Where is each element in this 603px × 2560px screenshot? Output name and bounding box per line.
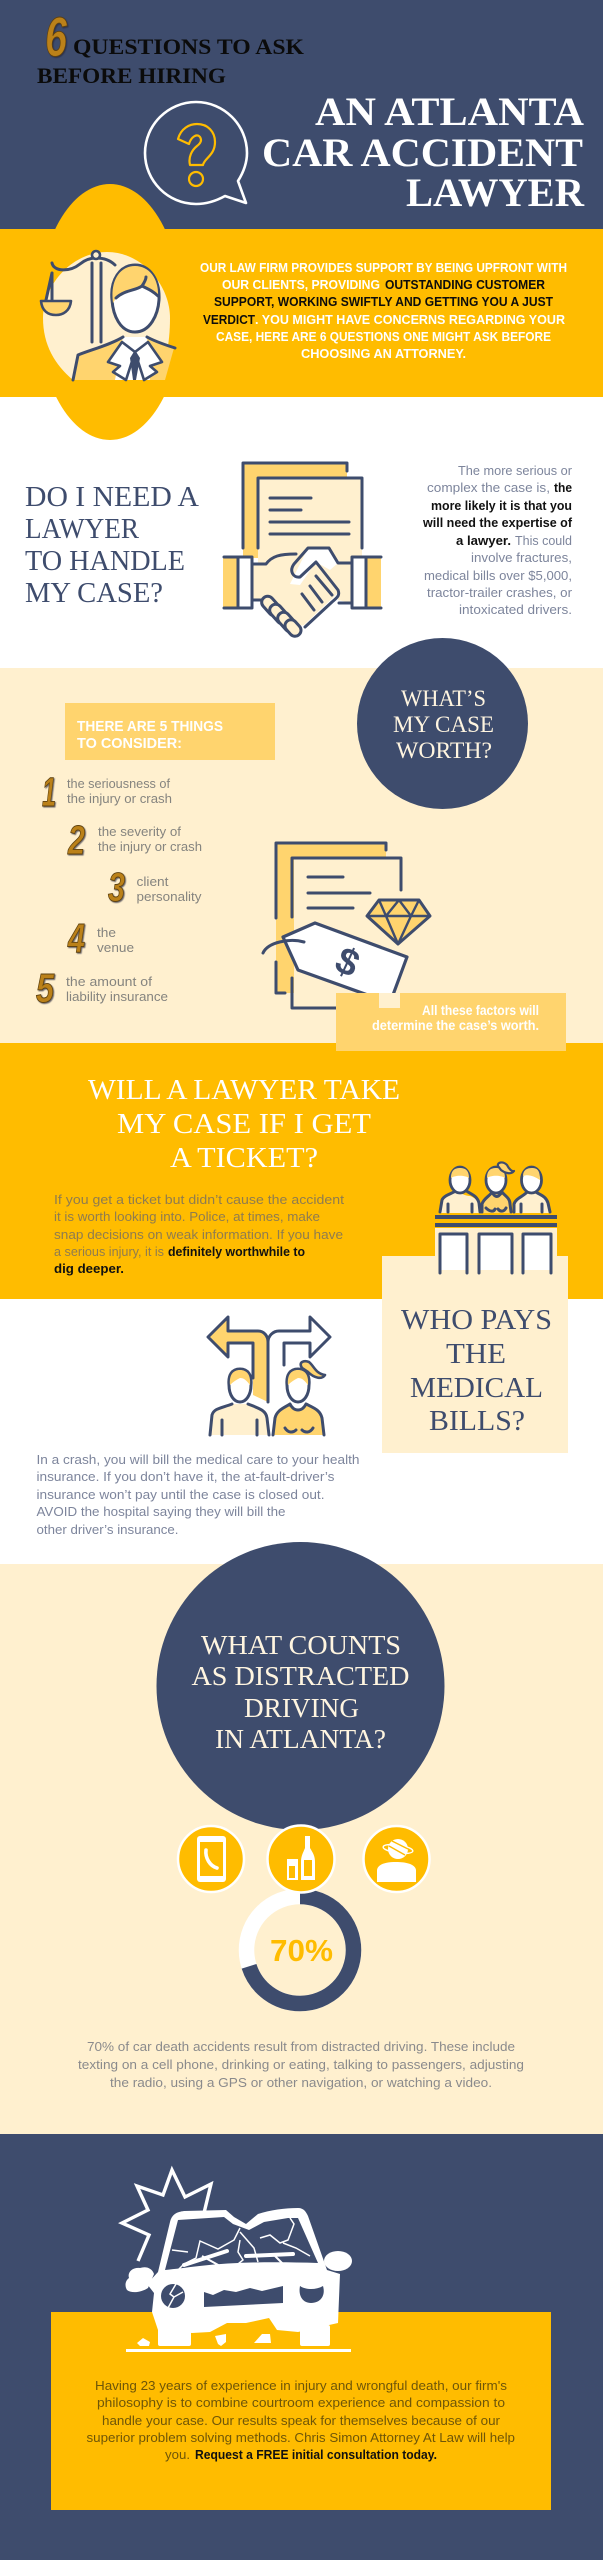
donut chart: 70 percent: 70% [270,1933,333,1968]
text block: firm introduction: SUPPORT, WORKING SWIFTLY AND GETTING YOU A JUST [214,294,553,309]
heading circle: what counts as distracted driving: IN ATLANTA? [215,1724,386,1754]
text block: medical bills explanation: AVOID the hospital saying they will bill the [36,1504,286,1519]
panel: footer call to action [0,2134,603,2560]
text block: firm introduction: OUTSTANDING CUSTOMER [385,277,546,292]
list item 1: the seriousness of [67,776,170,791]
title: an Atlanta car accident lawyer: CAR ACCIDENT [262,130,583,175]
icon: documents and handshake [223,463,381,639]
list item 4: 4 [67,915,85,961]
icon: documents, diamond and price tag: $ [329,939,366,986]
text block: medical bills explanation: insurance. If you don’t have it, the at-fault-driver’s [36,1469,335,1484]
text block: case seriousness [422,463,573,617]
callout: factors determine worth [336,993,566,1051]
callout: five things to consider [65,703,275,760]
text block: ticket explanation: definitely worthwhile to [168,1244,305,1259]
text block: case seriousness: tractor-trailer crashes, or [427,585,573,600]
text block: ticket explanation: a serious injury, it is [54,1244,164,1259]
callout: factors determine worth: determine the case’s worth. [372,1017,539,1033]
text block: ticket explanation: it is worth looking into. Police, at times, make [54,1209,320,1224]
icon: jury box [435,1162,557,1273]
text block: ticket explanation: dig deeper. [54,1261,124,1276]
list item 5: 5 [36,965,55,1011]
heading circle: what's my case worth: MY CASE [393,712,494,737]
heading: do I need a lawyer: DO I NEED A [25,482,200,513]
list item 5: liability insurance [66,989,168,1004]
text block: ticket explanation [54,1192,344,1276]
heading: will a lawyer take my case [88,1075,400,1174]
heading box: who pays the medical bills: BILLS? [429,1405,525,1437]
heading: will a lawyer take my case: A TICKET? [170,1143,318,1174]
icon: speech bubble with question mark [145,102,247,204]
heading circle: what counts as distracted driving [156,1542,444,1830]
list item 3: personality [136,889,202,904]
text block: case seriousness: medical bills over $5,000, [424,568,572,583]
list item 4 [67,915,134,961]
list item 3 [108,864,202,910]
text block: firm introduction: OUR CLIENTS, PROVIDING [222,277,380,292]
donut chart: 70 percent [246,1896,354,2004]
text block: firm philosophy and call to action: philosophy is to combine courtroom experience and compassion to [97,2395,505,2410]
title: an Atlanta car accident lawyer [262,89,585,215]
text block: medical bills explanation [36,1452,360,1537]
text block: firm philosophy and call to action: superior problem solving methods. Chris Simon Attorney At Law will help [86,2430,515,2445]
text block: firm philosophy and call to action: handle your case. Our results speak for themselves because of our [102,2413,501,2428]
icon: documents, diamond and price tag [263,843,430,1008]
icon: distracted person [364,1826,430,1892]
list item 3: client [136,874,169,889]
heading box: who pays the medical bills: THE [446,1338,506,1370]
heading circle: what counts as distracted driving: DRIVING [244,1693,359,1723]
text block: case seriousness: complex the case is, [427,480,550,495]
list item 1: the injury or crash [67,791,172,806]
icon: phone [178,1826,244,1892]
list item 2 [67,817,202,863]
text block: firm introduction: CASE, HERE ARE 6 QUESTIONS ONE MIGHT ASK BEFORE [216,329,551,344]
text block: distracted driving statistic: 70% of car death accidents result from distracted driving. These include [87,2039,515,2054]
text block: firm philosophy and call to action: Request a FREE initial consultation today. [195,2447,437,2462]
heading circle: what counts as distracted driving: AS DISTRACTED [192,1661,410,1691]
text block: firm philosophy and call to action: you. [165,2447,190,2462]
list item 2: the severity of [98,824,181,839]
list item 1 [42,769,172,815]
callout: five things to consider: TO CONSIDER: [77,735,182,752]
text block: case seriousness: the [554,480,572,495]
text block: case seriousness: involve fractures, [471,550,572,565]
heading: will a lawyer take my case: MY CASE IF I GET [117,1109,371,1140]
icon: crashed car [122,2170,352,2352]
text block: case seriousness: more likely it is that you [431,498,572,513]
panel: will a lawyer take my case [0,1043,603,1299]
text block: case seriousness: intoxicated drivers. [459,602,572,617]
heading circle: what's my case worth: WORTH? [396,738,492,763]
text block: firm introduction: OUR LAW FIRM PROVIDES SUPPORT BY BEING UPFRONT WITH [200,260,567,275]
list item 3: 3 [108,864,125,910]
heading: do I need a lawyer [25,482,200,609]
text block: firm introduction: VERDICT [203,312,255,327]
heading: 6 questions to ask before hiring [37,5,304,88]
panel: what's my case worth [0,638,603,1051]
heading box: who pays the medical bills: MEDICAL [410,1372,543,1404]
heading: will a lawyer take my case: WILL A LAWYER TAKE [88,1075,400,1106]
text block: firm philosophy and call to action: Having 23 years of experience in injury and wrongful death, our firm's [95,2378,508,2393]
list item 5: the amount of [66,974,152,989]
heading: do I need a lawyer: LAWYER [25,514,139,545]
list item 5 [36,965,168,1011]
icon: bottle and glass [268,1826,334,1892]
text block: firm philosophy and call to action [86,2378,515,2462]
text block: medical bills explanation: other driver’s insurance. [36,1522,179,1537]
text block: medical bills explanation: In a crash, you will bill the medical care to your health [36,1452,360,1467]
text block: case seriousness: will need the expertise of [422,515,573,530]
icon: lawyer with scales of justice [41,251,175,380]
text block: distracted driving statistic: the radio, using a GPS or other navigation, or watching a video. [110,2075,492,2090]
heading: do I need a lawyer: TO HANDLE [25,546,185,577]
list item 4: venue [97,940,134,955]
title: an Atlanta car accident lawyer: AN ATLANTA [315,89,584,134]
list item 2: the injury or crash [98,839,202,854]
heading circle: what counts as distracted driving: WHAT COUNTS [201,1630,401,1660]
panel: who pays the medical bills [36,1256,568,1537]
heading box: who pays the medical bills [382,1256,568,1453]
heading circle: what's my case worth [357,638,528,809]
title: an Atlanta car accident lawyer: LAWYER [406,170,585,215]
text block: firm introduction [200,260,567,361]
heading circle: what's my case worth: WHAT’S [401,686,486,711]
list item 2: 2 [67,817,85,863]
icon: two people at diverging arrows [208,1317,330,1435]
callout: five things to consider: THERE ARE 5 THINGS [77,718,223,735]
text block: case seriousness: a lawyer. [456,533,511,548]
text block: firm introduction: CHOOSING AN ATTORNEY. [301,346,466,361]
text block: case seriousness: This could [515,533,572,548]
heading: 6 questions to ask before hiring: 6 [45,5,68,68]
panel: hero header [0,0,603,440]
heading: 6 questions to ask before hiring: BEFORE HIRING [37,63,226,88]
list item 1: 1 [42,769,56,815]
callout: factors determine worth: All these factors will [422,1002,539,1018]
panel: distracted driving [0,1542,603,2134]
heading: do I need a lawyer: MY CASE? [25,578,163,609]
text block: firm introduction: . YOU MIGHT HAVE CONCERNS REGARDING YOUR [255,312,566,327]
text block: ticket explanation: If you get a ticket but didn’t cause the accident [54,1192,344,1207]
panel: do I need a lawyer [25,463,573,639]
text block: distracted driving statistic [78,2039,524,2090]
heading box: who pays the medical bills: WHO PAYS [401,1304,552,1336]
text block: case seriousness: The more serious or [458,463,573,478]
text block: distracted driving statistic: texting on a cell phone, drinking or eating, talking to passengers, adjusting [78,2057,524,2072]
text block: ticket explanation: snap decisions on weak information. If you have [54,1227,343,1242]
list item 4: the [97,925,116,940]
heading: 6 questions to ask before hiring: QUESTIONS TO ASK [73,34,304,59]
text block: medical bills explanation: insurance won’t pay until the case is closed out. [36,1487,324,1502]
